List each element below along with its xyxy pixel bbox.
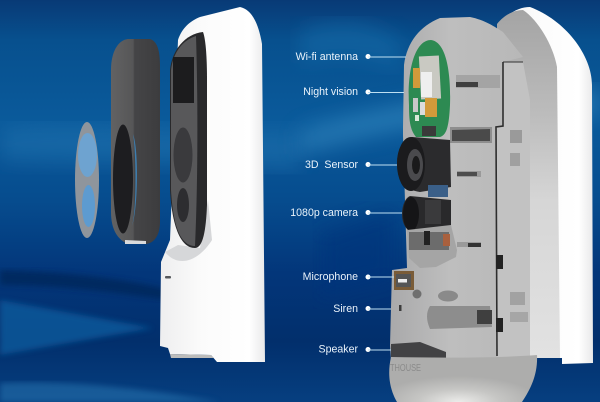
label: Night vision [303, 86, 404, 98]
label: 3D Sensor [305, 159, 397, 171]
camera board [407, 225, 457, 268]
label: Speaker: Speaker [319, 344, 358, 356]
label: Microphone [303, 271, 394, 283]
label: Wi-fi antenna: Wi-fi antenna [296, 51, 358, 63]
front shell large lens window [174, 128, 192, 182]
front shell small lens window [177, 188, 189, 222]
label: Speaker [319, 344, 391, 356]
base dome [389, 355, 537, 402]
main gray body [390, 17, 523, 360]
board module [421, 72, 432, 97]
microphone module [394, 271, 414, 290]
label: Siren [333, 303, 391, 315]
label: Night vision: Night vision [303, 86, 358, 98]
label: 1080p camera [290, 207, 402, 219]
front shell screen [173, 57, 194, 103]
front shell dark opening [170, 32, 207, 248]
label: Microphone: Microphone [303, 271, 358, 283]
label: Wi-fi antenna [296, 51, 406, 63]
front bezel ring [111, 39, 160, 244]
circuit board [409, 40, 450, 137]
rear white shell [497, 7, 593, 364]
label: Siren: Siren [333, 303, 358, 315]
lens cover glass [75, 122, 99, 238]
label: 3D Sensor: 3D Sensor [305, 159, 358, 171]
front white shell [160, 7, 265, 362]
3D sensor lens [397, 137, 451, 197]
label: 1080p camera: 1080p camera [290, 207, 358, 219]
1080p camera lens [402, 196, 451, 233]
board shield [419, 56, 441, 99]
brand text on dome: THOUSE [390, 363, 421, 374]
